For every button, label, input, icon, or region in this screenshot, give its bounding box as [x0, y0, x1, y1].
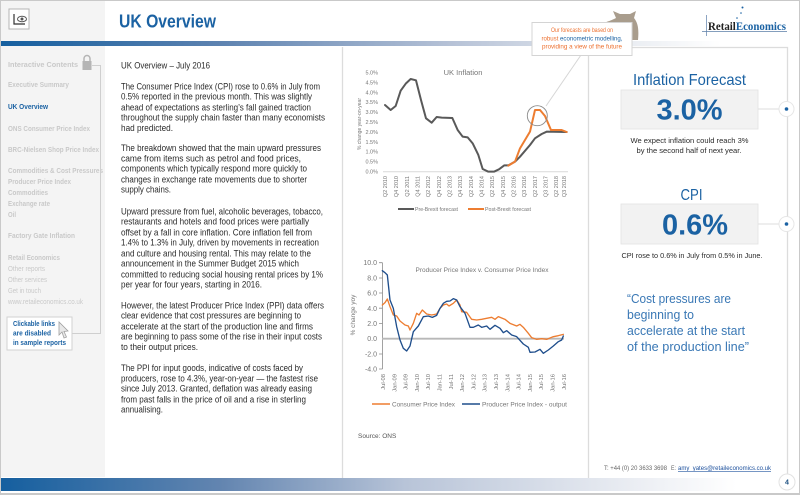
paragraph 1	[121, 81, 325, 133]
line: consumer price index	[382, 271, 563, 353]
paragraph 2: came from items such as petrol and food prices,	[121, 153, 301, 163]
paragraph 3: announcement in the Summer Budget 2015 which	[121, 259, 299, 269]
y axis title: % change yoy	[350, 294, 357, 335]
icon: padlock	[82, 56, 92, 70]
icon: animal illustration	[600, 11, 638, 40]
x axis labels: Q4 2010	[394, 176, 400, 197]
callout: forecasts	[532, 22, 632, 56]
sidebar navigation: Other services	[8, 277, 47, 284]
x axis labels	[383, 176, 568, 197]
y axis labels: 1.0%	[365, 150, 378, 156]
contact details: T: +44 (0) 20 3633 3698	[604, 466, 668, 472]
sidebar navigation: Executive Summary	[8, 82, 69, 89]
timeline nodes	[779, 102, 794, 232]
heading: Inflation Forecast	[633, 72, 747, 89]
callout: forecasts: Our forecasts are based on	[551, 28, 613, 34]
pull quote: beginning to	[627, 308, 694, 322]
sidebar navigation: Retail Economics	[8, 255, 60, 262]
x axis labels: Jan-16	[550, 374, 556, 392]
x axis labels: Q2 2015	[490, 176, 496, 197]
y axis labels: 0.0%	[365, 170, 378, 176]
pull quote	[627, 292, 749, 354]
x axis labels: Jul-13	[494, 374, 500, 390]
x axis labels: Q2 2018	[554, 176, 560, 197]
paragraph 3: per year for four years, starting in 2016.	[121, 280, 262, 290]
paragraph 3: offset by a fall in core inflation. Core inflation fell from	[121, 228, 312, 238]
x axis labels: Jan-13	[483, 374, 489, 392]
chart title: Producer Price Index v. Consumer Price Index	[416, 267, 549, 274]
x axis labels: Jan-15	[528, 374, 534, 392]
legend	[372, 402, 567, 408]
x axis labels: Jul-10	[426, 374, 432, 390]
chart: UK Inflation	[357, 68, 568, 213]
paragraph 1: had predicted.	[121, 123, 173, 133]
sidebar navigation: www.retaileconomics.co.uk	[7, 299, 83, 306]
x axis labels: Jul-12	[471, 374, 477, 390]
x axis labels: Q3 2018	[562, 176, 568, 197]
y axis labels: 4.0	[367, 306, 377, 313]
line: post-Brexit forecast	[508, 110, 567, 166]
x axis labels: Q2 2014	[469, 176, 475, 197]
pull quote: of the production line”	[627, 340, 749, 354]
callout: forecasts: providing a view of the future	[542, 44, 623, 50]
panel dividers	[342, 47, 788, 478]
paragraph 4	[121, 300, 324, 352]
y axis labels: 4.5%	[365, 80, 378, 86]
chart: Producer Price Index v. Consumer Price Index	[350, 260, 568, 408]
paragraph 4: However, the latest Producer Price Index (PPI) data offers	[121, 300, 324, 310]
x axis labels: Q2 2017	[533, 176, 539, 197]
line: pre-Brexit forecast	[385, 79, 567, 172]
y axis labels: -2.0	[365, 352, 377, 358]
article heading: UK Overview – July 2016	[121, 61, 210, 71]
title: UK Overview	[119, 12, 217, 32]
y axis labels: 3.0%	[365, 110, 378, 116]
sidebar background	[1, 1, 105, 477]
y axis labels: 1.5%	[365, 140, 378, 146]
stat box	[621, 204, 758, 244]
heading: CPI	[680, 187, 702, 204]
y axis title: % change year-on-year	[357, 98, 363, 150]
callout: clickable links disabled	[7, 317, 72, 350]
paragraph 5: from past falls in the price of oil and a rise in sterling	[121, 394, 306, 404]
legend: Consumer Price Index	[392, 402, 456, 408]
paragraph 3: 1.4% to 1.3% in July, driven by movements in recreation	[121, 238, 319, 248]
callout: clickable links disabled: are disabled	[13, 328, 51, 338]
paragraph 4: accelerate at the start of the production line and firms	[121, 321, 313, 331]
callout pointer line	[546, 55, 581, 106]
paragraph 5: annualising.	[121, 405, 163, 415]
logo: Retail Economics: RetailEconomics	[708, 21, 786, 33]
description	[630, 136, 749, 155]
paragraph 4: are beginning to pass some of the rise in their input costs	[121, 332, 322, 342]
sidebar bracket line	[72, 66, 100, 334]
chart title: UK Inflation	[444, 68, 482, 77]
paragraph 2: supply chains.	[121, 185, 171, 195]
paragraph 3: committed to reducing social housing rental prices by 1%	[121, 269, 323, 279]
y axis labels: 5.0%	[365, 70, 378, 76]
sidebar navigation: Get in touch	[8, 288, 41, 295]
y axis labels: 2.0	[367, 321, 377, 328]
x axis labels: Q4 2011	[416, 176, 422, 197]
paragraph 3: Upward pressure from fuel, alcoholic beverages, tobacco,	[121, 206, 323, 216]
y axis labels: 2.5%	[365, 120, 378, 126]
highlight circle	[527, 106, 547, 126]
y axis labels: 3.5%	[365, 100, 378, 106]
logo: Retail Economics	[702, 6, 787, 36]
y axis labels: 6.0	[367, 290, 377, 298]
sidebar navigation	[7, 60, 103, 306]
paragraph 2: components which typically respond more quickly to	[121, 164, 307, 174]
x axis labels: Q2 2013	[448, 176, 454, 197]
nav heading: interactive contents: Interactive Contents	[8, 60, 78, 69]
x axis labels: Jul-16	[562, 374, 568, 390]
x axis labels: Jan-10	[415, 374, 421, 392]
pull quote: accelerate at the start	[627, 324, 746, 338]
sidebar navigation: Commodities & Cost Pressures	[8, 168, 103, 175]
legend: Pre-Brexit forecast	[415, 207, 458, 213]
paragraph 5: producers, rose to 4.3%, year-on-year — the fastest rise	[121, 373, 318, 383]
x axis labels: Jan-09	[392, 374, 398, 392]
sidebar navigation: BRC-Nielsen Shop Price Index	[8, 147, 99, 154]
x axis labels: Jan-11	[438, 374, 444, 391]
stat box	[621, 90, 758, 129]
sidebar navigation: Exchange rate	[8, 201, 50, 208]
legend: Producer Price Index - output	[482, 402, 567, 408]
paragraph 4: to their output prices.	[121, 342, 198, 352]
x axis labels: Q4 2014	[480, 176, 486, 197]
callout: clickable links disabled: Clickable links	[13, 319, 55, 328]
axes	[379, 263, 382, 369]
x axis labels: Q2 2010	[383, 176, 389, 197]
connector	[758, 108, 780, 110]
y axis labels: 10.0	[363, 260, 377, 267]
source note: Source: ONS	[358, 433, 397, 440]
paragraph 2	[121, 143, 321, 195]
x axis labels: Jul-08	[381, 374, 387, 390]
paragraph 5	[121, 363, 318, 415]
x axis labels: Jul-14	[517, 373, 523, 390]
contact details: amy_yates@retaileconomics.co.uk	[678, 466, 772, 472]
x axis labels	[381, 373, 568, 392]
line: producer price index output	[382, 271, 563, 353]
description: We expect inflation could reach 3%	[630, 136, 749, 145]
stat value: 3.0%	[656, 94, 723, 126]
article text	[121, 61, 325, 415]
page number	[779, 474, 795, 490]
x axis labels: Q4 2012	[437, 176, 443, 197]
paragraph 1: 0.5% reported in the previous month. This was slightly	[121, 92, 312, 102]
paragraph 5: since July 2013. Granted, deflation was already easing	[121, 384, 312, 394]
footer bar	[1, 478, 736, 491]
description: CPI rose to 0.6% in July from 0.5% in June.	[622, 251, 763, 260]
y axis labels: -4.0	[365, 366, 377, 374]
sidebar navigation: Producer Price Index	[8, 179, 71, 186]
x axis labels: Q4 2015	[501, 176, 507, 197]
paragraph 1: The Consumer Price Index (CPI) rose to 0.6% in July from	[121, 81, 320, 91]
icon: cursor	[59, 322, 68, 338]
pull quote: “Cost pressures are	[627, 292, 731, 306]
header bar	[1, 41, 721, 46]
sidebar navigation: Oil	[8, 212, 16, 219]
paragraph 5: The PPI for input goods, indicative of costs faced by	[121, 363, 303, 373]
x axis labels: Q2 2011	[405, 176, 411, 197]
x axis labels: Q3 2017	[544, 176, 550, 197]
legend	[398, 207, 531, 213]
x axis labels: Jul-09	[404, 374, 410, 390]
y axis labels: 2.0%	[365, 130, 378, 136]
y axis labels: 4.0%	[365, 90, 378, 96]
y axis labels: 8.0	[367, 275, 377, 282]
x axis labels: Q4 2013	[458, 176, 464, 197]
contact details: E:	[671, 466, 676, 472]
paragraph 1: ahead of expectations as sterling’s fall gained traction	[121, 102, 311, 112]
x axis labels: Jul-11	[449, 374, 455, 389]
sidebar navigation: UK Overview	[8, 104, 49, 111]
stat value: 0.6%	[662, 210, 728, 242]
x axis labels: Q3 2016	[522, 176, 528, 197]
x axis labels: Q2 2012	[426, 176, 432, 197]
sidebar navigation: Factory Gate Inflation	[8, 233, 75, 240]
paragraph 2: changes in exchange rate movements due to shorter	[121, 174, 307, 184]
paragraph 2: The breakdown showed that the main upward pressures	[121, 143, 321, 153]
panel: CPI	[621, 187, 780, 260]
x axis labels: Jan-12	[460, 374, 466, 392]
sidebar navigation: Commodities	[8, 190, 48, 197]
page number: 4	[785, 480, 789, 486]
contact details	[604, 466, 772, 472]
icon: chart with eye	[9, 9, 29, 29]
x axis labels: Jan-14	[505, 373, 511, 392]
paragraph 3: and culture and housing rental. This may relate to the	[121, 248, 311, 258]
description: by the second half of next year.	[636, 146, 742, 155]
x axis labels: Jul-15	[539, 374, 545, 390]
y axis labels: 0.0	[367, 336, 377, 343]
paragraph 4: clear evidence that cost pressures are beginning to	[121, 311, 301, 321]
paragraph 3	[121, 206, 323, 290]
sidebar navigation: Other reports	[8, 266, 45, 273]
baseline	[383, 171, 568, 173]
callout: clickable links disabled: in sample reports	[13, 338, 66, 347]
sidebar navigation: ONS Consumer Price Index	[8, 126, 90, 133]
y axis labels	[365, 70, 378, 176]
callout: forecasts: robust econometric modelling,	[542, 36, 623, 42]
x axis labels: Q2 2016	[512, 176, 518, 197]
y axis labels	[363, 260, 377, 374]
connector	[758, 223, 780, 225]
paragraph 1: throughout the supply chain faster than many economists	[121, 113, 325, 123]
y axis labels: 0.5%	[365, 160, 378, 166]
paragraph 3: restaurants and hotels and food prices were partially	[121, 217, 309, 227]
panel: inflation forecast	[621, 72, 780, 155]
legend: Post-Brexit forecast	[485, 207, 531, 213]
